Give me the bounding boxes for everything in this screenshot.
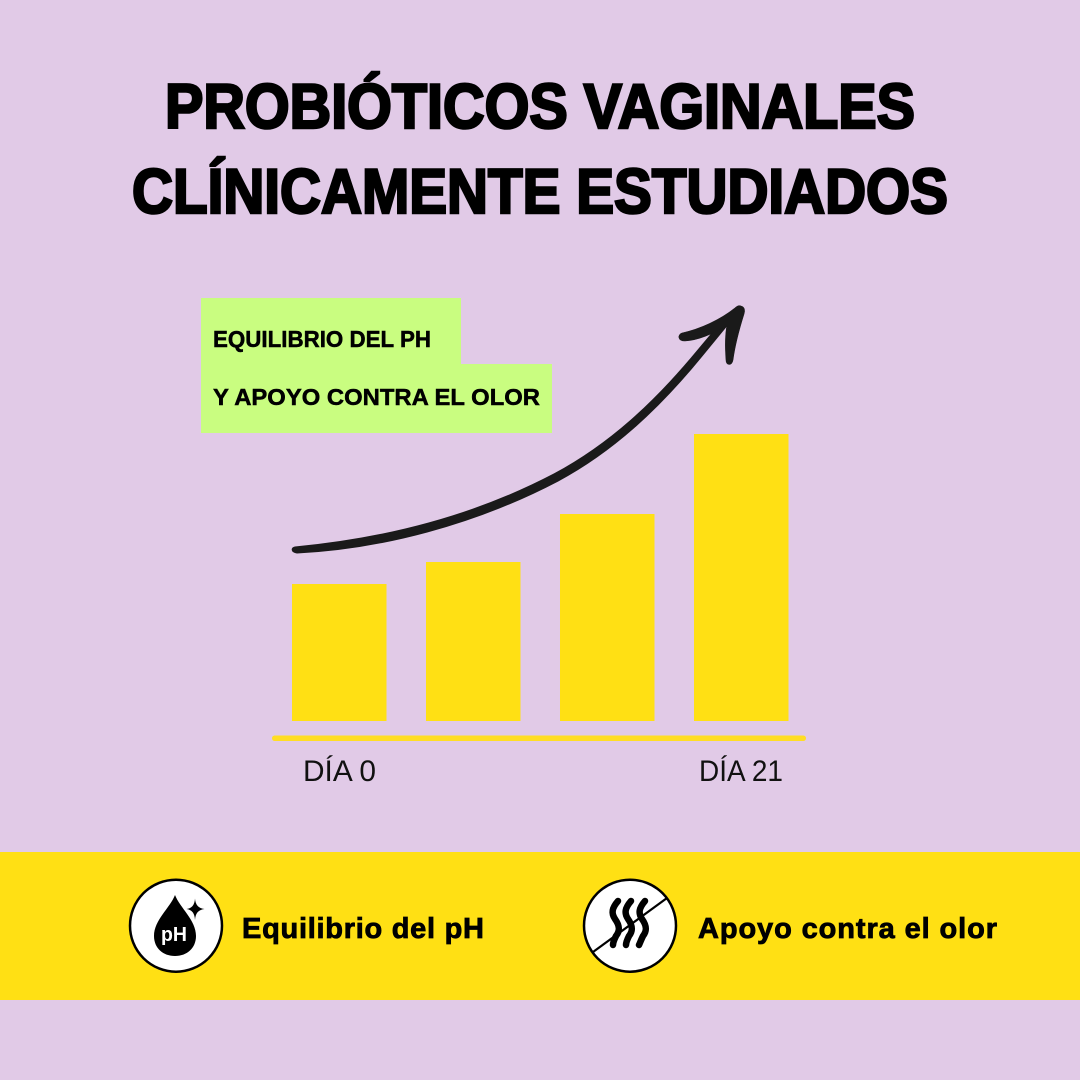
title: PROBIÓTICOS VAGINALES bbox=[165, 72, 915, 142]
bottom banner bbox=[0, 852, 1080, 1000]
chart baseline bbox=[272, 736, 806, 741]
odor waves bbox=[613, 901, 646, 945]
callout: equilibrio del pH y apoyo contra el olor: EQUILIBRIO DEL PH bbox=[213, 326, 431, 352]
callout: equilibrio del pH y apoyo contra el olor: Y APOYO CONTRA EL OLOR bbox=[213, 384, 540, 410]
arrow: upward growth trend bbox=[292, 306, 745, 553]
slash bbox=[593, 898, 667, 952]
bar: day 0 bbox=[292, 584, 386, 721]
drop shape bbox=[154, 895, 196, 956]
axis label: day 21: DÍA 21 bbox=[699, 755, 783, 788]
pH text: pH bbox=[161, 924, 187, 946]
icon: pH drop bbox=[130, 880, 222, 972]
label: apoyo contra el olor: Apoyo contra el olor bbox=[698, 913, 997, 945]
bar: day 21 bbox=[694, 434, 788, 721]
icon: no odor bbox=[584, 880, 676, 972]
bar: week 2 bbox=[560, 514, 654, 721]
sparkle bbox=[186, 898, 204, 920]
callout: equilibrio del pH y apoyo contra el olor bbox=[201, 298, 552, 433]
bar: week 1 bbox=[426, 562, 520, 721]
axis label: day 0: DÍA 0 bbox=[303, 755, 376, 788]
bar chart bbox=[272, 434, 806, 788]
title: CLÍNICAMENTE ESTUDIADOS bbox=[132, 157, 948, 227]
title bbox=[132, 72, 948, 227]
label: equilibrio del pH: Equilibrio del pH bbox=[242, 913, 484, 945]
